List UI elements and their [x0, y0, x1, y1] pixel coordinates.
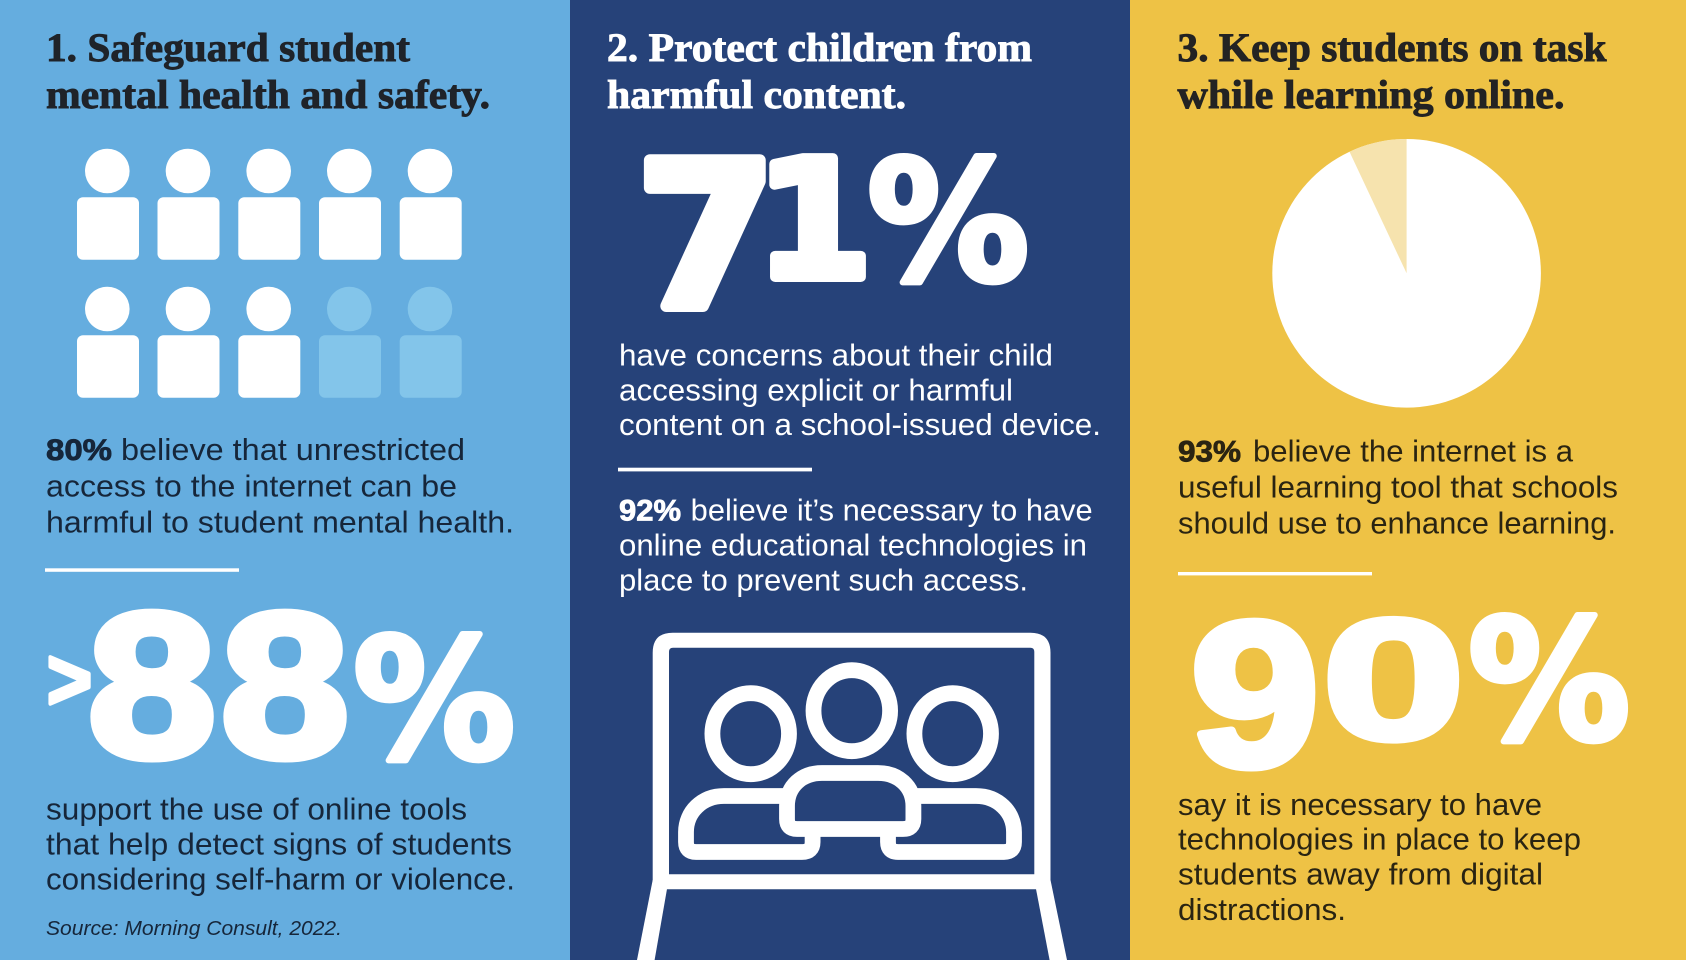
- panel: protect children from harmful content: [570, 0, 1130, 960]
- text: have concerns: [619, 339, 1101, 442]
- text: support the use: that help detect signs of students: [46, 827, 512, 861]
- text: have concerns: have concerns about their child: [619, 339, 1053, 373]
- text: say it is necessary: distractions.: [1178, 893, 1346, 927]
- text: 92% believe: 92%: [619, 495, 681, 528]
- chart: pie 93%: [1272, 139, 1541, 408]
- text: 93% believe: useful learning tool that schools: [1178, 470, 1618, 504]
- text: 80% believe: access to the internet can be: [46, 470, 457, 504]
- big stat: >88%: [47, 571, 515, 801]
- text: 92% believe: believe it’s necessary to have: [691, 494, 1093, 528]
- text: say it is necessary: [1178, 788, 1581, 927]
- text: 80% believe: believe that unrestricted: [121, 433, 465, 467]
- heading: panel 1: [46, 25, 490, 117]
- big stat: >88%: >: [47, 632, 92, 728]
- icon: laptop with three people: [637, 633, 1067, 960]
- panel: safeguard student mental health: [0, 0, 570, 960]
- big stat: >88%: %: [353, 603, 515, 798]
- panel: keep students on task: [1130, 0, 1686, 960]
- heading: panel 3: while learning online.: [1178, 72, 1564, 117]
- text: have concerns: accessing explicit or harmful: [619, 374, 1013, 408]
- text: 80% believe: [46, 433, 514, 539]
- source note: Source: Morning Consult, 2022.: [46, 917, 342, 940]
- heading: panel 2: [607, 25, 1032, 117]
- text: 92% believe: [619, 494, 1093, 598]
- heading: panel 2: 2. Protect children from: [607, 25, 1032, 70]
- big stat: 90%: 9: [1191, 580, 1319, 810]
- big stat: 71%: %: [867, 125, 1029, 320]
- big stat: >88%: 88: [88, 571, 349, 801]
- big stat: 71%: [636, 121, 1029, 354]
- big stat: 90%: [1191, 580, 1630, 810]
- text: support the use: [46, 792, 515, 896]
- big stat: 71%: 1: [756, 126, 872, 316]
- heading: panel 1: 1. Safeguard student: [46, 25, 411, 70]
- text: 93% believe: 93%: [1178, 436, 1241, 469]
- icon: ten people, eight filled: [77, 149, 462, 398]
- heading: panel 1: mental health and safety.: [46, 72, 490, 117]
- text: support the use: support the use of online tools: [46, 792, 467, 826]
- text: 80% believe: 80%: [46, 434, 112, 467]
- text: say it is necessary: technologies in place to keep: [1178, 822, 1581, 856]
- text: 93% believe: believe the internet is a: [1253, 435, 1573, 469]
- big stat: 90%: %: [1468, 584, 1630, 779]
- text: 93% believe: [1178, 435, 1618, 540]
- big stat: 90%: 0: [1322, 584, 1465, 776]
- heading: panel 3: [1178, 25, 1607, 117]
- text: have concerns: content on a school-issued device.: [619, 408, 1101, 442]
- text: support the use: considering self-harm or violence.: [46, 862, 515, 896]
- heading: panel 3: 3. Keep students on task: [1178, 25, 1607, 70]
- text: say it is necessary: say it is necessary to have: [1178, 788, 1542, 822]
- text: 92% believe: online educational technologies in: [619, 529, 1087, 563]
- text: 93% believe: should use to enhance learning.: [1178, 506, 1616, 540]
- text: 92% believe: place to prevent such access.: [619, 564, 1028, 598]
- heading: panel 2: harmful content.: [607, 72, 906, 117]
- text: say it is necessary: students away from digital: [1178, 857, 1543, 891]
- text: 80% believe: harmful to student mental health.: [46, 505, 514, 539]
- big stat: 71%: 7: [636, 121, 776, 354]
